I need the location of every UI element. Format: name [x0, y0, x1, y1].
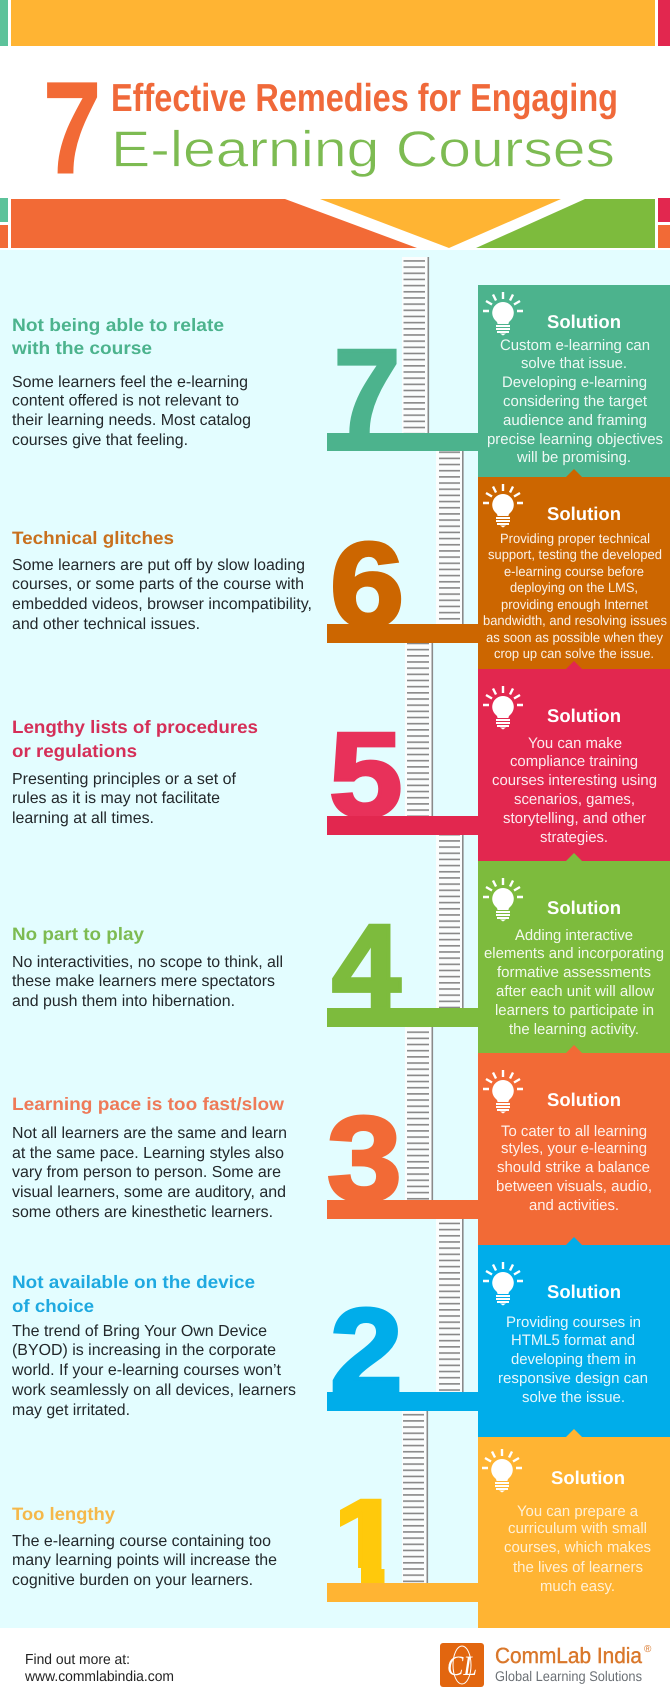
panel: solution 5: [478, 661, 670, 861]
heading: Not being able to relate: [12, 315, 224, 335]
solution heading: Solution: [547, 1089, 621, 1110]
body: [11, 1323, 296, 1419]
solution text: considering the target: [503, 393, 648, 410]
body: (BYOD) is increasing in the corporate: [12, 1342, 276, 1359]
body: some others are kinesthetic learners.: [12, 1204, 273, 1221]
arrow: notch 6: [566, 469, 582, 477]
solution text: will be promising.: [516, 449, 631, 466]
icon: light bulb: [483, 1070, 523, 1114]
body: world. If your e-learning courses won’t: [11, 1362, 282, 1379]
solution text: and activities.: [529, 1197, 619, 1214]
panel: solution 4: [478, 853, 670, 1053]
body: [12, 1125, 287, 1221]
solution text: Custom e-learning can: [500, 337, 650, 354]
heading: of choice: [12, 1296, 94, 1316]
text block: problem 4: [12, 924, 283, 1010]
solution text: bandwidth, and resolving issues: [483, 613, 667, 628]
arrow: notch 4: [566, 853, 582, 861]
solution text: [487, 337, 663, 466]
numeral 6: 6: [330, 518, 404, 652]
panel: solution 6: [478, 469, 670, 669]
body: Some learners are put off by slow loading: [12, 557, 305, 574]
numeral 7: 7: [334, 325, 400, 459]
body: vary from person to person. Some are: [12, 1164, 281, 1181]
numeral 3: 3: [327, 1092, 402, 1226]
body: Not all learners are the same and learn: [12, 1125, 287, 1142]
logo wordmark: CommLab India: [495, 1643, 643, 1668]
panel: solution 1: [478, 1429, 670, 1628]
solution heading: Solution: [547, 1281, 621, 1302]
solution text: scenarios, games,: [514, 791, 635, 808]
body: courses give that feeling.: [12, 432, 188, 449]
icon: light bulb: [483, 878, 523, 922]
text block: problem 7: [11, 315, 251, 449]
solution text: Adding interactive: [515, 927, 633, 944]
panel: solution 7: [478, 285, 670, 477]
solution text: [483, 531, 667, 661]
solution text: between visuals, audio,: [496, 1178, 652, 1195]
panel: solution 3: [478, 1045, 670, 1245]
body: their learning needs. Most catalog: [12, 412, 251, 429]
arrow: notch 5: [566, 661, 582, 669]
background: top bar: [0, 0, 670, 46]
shelf 3: [327, 1200, 478, 1219]
solution text: the learning activity.: [509, 1021, 639, 1038]
arrow: notch 3: [566, 1045, 582, 1053]
solution text: formative assessments: [497, 964, 651, 981]
solution heading: Solution: [547, 503, 621, 524]
body: Some learners feel the e-learning: [12, 374, 248, 391]
shelf 7: [327, 433, 478, 451]
decorative chevron band: [0, 198, 670, 248]
icon: light bulb: [483, 686, 523, 730]
heading: Too lengthy: [12, 1504, 115, 1524]
shelf 5: [327, 816, 478, 835]
solution text: curriculum with small: [508, 1520, 647, 1537]
heading: Not available on the device: [12, 1272, 255, 1292]
heading: [11, 315, 224, 358]
solution text: compliance training: [510, 753, 638, 770]
ladder 6: [436, 448, 464, 625]
solution text: [492, 735, 657, 846]
solution text: [504, 1503, 651, 1595]
solution text: learners to participate in: [495, 1002, 654, 1019]
title numeral 7: 7: [43, 54, 101, 201]
solution text: precise learning objectives: [487, 431, 663, 448]
solution text: HTML5 format and: [511, 1332, 635, 1349]
ladder 1: [402, 1410, 428, 1583]
arrow: notch 1: [566, 1429, 582, 1437]
solution text: crop up can solve the issue.: [494, 646, 654, 661]
body: work seamlessly on all devices, learners: [11, 1382, 296, 1399]
solution text: deploying on the LMS,: [510, 580, 638, 595]
solution text: solve that issue.: [521, 355, 627, 372]
body: many learning points will increase the: [12, 1552, 277, 1569]
text block: problem 5: [12, 717, 258, 827]
body: courses, or some parts of the course with: [12, 576, 304, 593]
body: and push them into hibernation.: [12, 993, 235, 1010]
logo: CommLab India: [440, 1643, 652, 1687]
solution text: the lives of learners: [513, 1559, 643, 1576]
solution text: To cater to all learning: [501, 1123, 647, 1140]
text block: problem 2: [11, 1272, 296, 1419]
heading: Learning pace is too fast/slow: [12, 1094, 285, 1114]
logo tagline: Global Learning Solutions: [495, 1668, 642, 1684]
body: [12, 557, 312, 633]
solution text: developing them in: [511, 1351, 636, 1368]
heading: Technical glitches: [12, 528, 174, 548]
solution text: solve the issue.: [522, 1389, 625, 1406]
body: and other technical issues.: [12, 616, 200, 633]
body: rules as it is may not facilitate: [12, 790, 220, 807]
shelf 2: [327, 1392, 478, 1411]
ladder 5: [405, 640, 433, 816]
numeral 4: 4: [332, 900, 401, 1034]
icon: light bulb: [483, 1262, 523, 1306]
solution text: You can make: [528, 735, 622, 752]
solution heading: Solution: [547, 705, 621, 726]
title line 2: E-learning Courses: [111, 120, 615, 178]
icon: light bulb: [483, 292, 523, 336]
panel: solution 2: [478, 1237, 670, 1437]
icon: light bulb: [483, 484, 523, 528]
ladder 2: [436, 1216, 464, 1392]
solution text: much easy.: [540, 1578, 615, 1595]
heading: with the course: [11, 338, 152, 358]
body: No interactivities, no scope to think, all: [12, 954, 283, 971]
solution text: should strike a balance: [497, 1159, 650, 1176]
solution text: support, testing the developed: [488, 547, 662, 562]
arrow: notch 2: [566, 1237, 582, 1245]
shelf 4: [327, 1008, 478, 1027]
heading: [12, 717, 258, 761]
footer: find out more: Find out more at:: [25, 1652, 130, 1668]
solution text: [496, 1123, 652, 1214]
solution text: providing enough Internet: [501, 597, 648, 612]
heading: No part to play: [12, 924, 144, 944]
solution text: courses interesting using: [492, 772, 657, 789]
solution text: responsive design can: [498, 1370, 648, 1387]
solution text: after each unit will allow: [496, 983, 654, 1000]
ladder 3: [405, 1024, 433, 1200]
shelf 1: [327, 1583, 478, 1602]
solution heading: Solution: [547, 897, 621, 918]
solution text: Developing e-learning: [502, 374, 647, 391]
title: [43, 54, 618, 201]
logo mark: [440, 1643, 484, 1687]
body: The e-learning course containing too: [12, 1533, 271, 1550]
numeral 5: 5: [329, 708, 402, 842]
body: The trend of Bring Your Own Device: [12, 1323, 267, 1340]
footer: find out more: [24, 1652, 174, 1685]
numeral 1: 1: [327, 1475, 406, 1609]
solution text: e-learning course before: [504, 564, 644, 579]
solution text: storytelling, and other: [503, 810, 646, 827]
registered mark: ®: [644, 1644, 652, 1655]
solution text: [484, 927, 664, 1038]
body: [12, 1533, 277, 1589]
body: at the same pace. Learning styles also: [12, 1145, 284, 1162]
ladder 4: [436, 832, 464, 1009]
solution text: Providing courses in: [506, 1314, 641, 1331]
ladder 7: [402, 257, 429, 433]
text block: problem 3: [12, 1094, 287, 1221]
solution text: elements and incorporating: [484, 945, 664, 962]
solution text: styles, your e-learning: [501, 1140, 647, 1157]
body: learning at all times.: [12, 810, 154, 827]
body: [12, 771, 237, 827]
body: visual learners, some are auditory, and: [12, 1184, 286, 1201]
numeral 2: 2: [330, 1284, 403, 1418]
solution heading: Solution: [551, 1467, 625, 1488]
body: embedded videos, browser incompatibility,: [12, 596, 312, 613]
body: [12, 374, 251, 449]
body: [12, 954, 283, 1010]
solution text: courses, which makes: [504, 1539, 651, 1556]
text block: problem 6: [12, 528, 312, 633]
heading: [12, 1272, 255, 1316]
heading: or regulations: [12, 741, 137, 761]
heading: Lengthy lists of procedures: [12, 717, 258, 737]
solution text: audience and framing: [503, 412, 647, 429]
body: these make learners mere spectators: [12, 973, 275, 990]
body: content offered is not relevant to: [12, 392, 239, 410]
icon: light bulb: [482, 1449, 522, 1492]
body: cognitive burden on your learners.: [12, 1572, 253, 1589]
body: Presenting principles or a set of: [12, 771, 237, 788]
text block: problem 1: [12, 1504, 277, 1589]
body: may get irritated.: [12, 1402, 130, 1419]
solution text: as soon as possible when they: [486, 630, 663, 645]
solution text: [498, 1314, 648, 1406]
footer: find out more: www.commlabindia.com: [24, 1669, 174, 1685]
logo mark: CL: [447, 1651, 477, 1682]
solution heading: Solution: [547, 311, 621, 332]
solution text: You can prepare a: [517, 1503, 639, 1520]
solution text: Providing proper technical: [500, 531, 650, 546]
solution text: strategies.: [540, 829, 608, 846]
shelf 6: [327, 624, 478, 643]
